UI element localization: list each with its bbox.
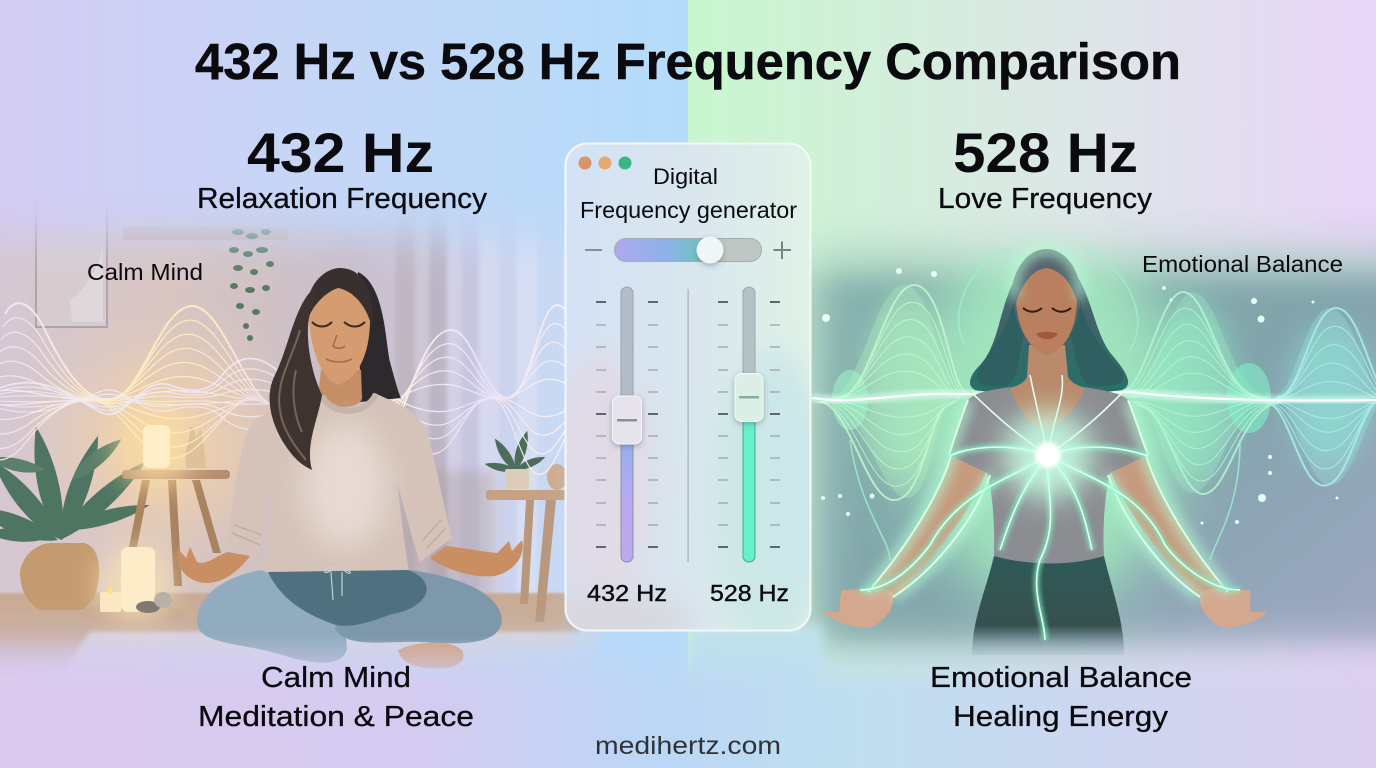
rabbit figurine [186,427,206,468]
wall [0,216,501,594]
back hair [356,272,401,402]
panel title line 1: Digital [653,164,718,189]
lobe fills [828,285,1376,498]
central bright line [812,392,1376,401]
small vase [547,464,564,490]
hair top [307,268,373,328]
heading: 528 Hz: 528 Hz [953,121,1138,184]
label: Calm Mind: Calm Mind [87,259,203,285]
sweater collar [322,394,376,411]
central horizontal glow [812,392,1376,401]
floor [0,592,581,668]
outer aura stroke [868,400,1228,597]
woman meditating [177,268,523,668]
left arm [868,456,986,604]
label: Emotional Balance: Emotional Balance [1142,251,1343,277]
secondary lavender wave [0,358,282,429]
feet [398,642,463,668]
candle tray [80,603,186,625]
tendrils glow [860,447,1240,640]
core glow [1003,410,1093,500]
back hair [970,252,1128,393]
divider [688,289,689,562]
left hand [177,547,250,583]
picture frame [35,220,108,328]
arc tendrils [850,248,1240,560]
432 Hz slider [612,287,642,562]
curtains [394,228,536,592]
tick marks [596,302,780,547]
right hand [430,540,523,576]
teal backdrop [803,234,1376,664]
hair highlights [279,330,306,460]
stones [136,592,172,613]
face [1016,268,1077,355]
left leg [197,570,347,663]
gold wave family [0,303,272,460]
nose and lips [326,335,352,362]
horizontal slider knob [696,236,724,264]
left hair strands [977,300,1024,386]
panel: digital frequency generator [564,142,812,632]
core star [1035,442,1061,468]
plus icon [774,242,791,259]
readout: 528 Hz: 528 Hz [710,580,789,606]
wave lobe glow [864,300,1370,480]
small candle [100,586,121,612]
heading: 432 Hz: 432 Hz [247,121,434,184]
432 Hz knob [612,396,642,444]
small potted plant [484,430,547,489]
sweater highlight [303,423,387,547]
eyes and mouth [1023,308,1071,312]
hair top [1011,249,1083,320]
caption: Healing Energy: Healing Energy [953,701,1169,733]
readout: 432 Hz: 432 Hz [587,580,667,606]
arm aura glow [868,249,1228,597]
sweater [226,393,452,574]
right lobe lines [1266,308,1376,486]
footer: website: medihertz.com [595,732,781,760]
tall candle glow [99,547,171,623]
right sound waves [812,285,1376,500]
tall candle [121,547,155,612]
right arm [1111,456,1228,604]
soft blue area below the panel [688,625,823,700]
neck [318,370,362,407]
right-side wave family [381,305,587,474]
subheading: Love Frequency: Love Frequency [938,183,1153,215]
left lobe lines [818,285,968,500]
caption: Meditation and Peace: Meditation & Peace [198,701,474,733]
shirt [949,387,1148,564]
528 Hz slider [735,287,763,562]
tendrils [860,375,1240,640]
closed eyes [312,322,365,326]
lips [1036,332,1058,339]
right scene: energy background [803,228,1376,664]
minus icon [585,249,602,251]
table lamp glow [117,401,197,489]
panel tint [566,353,810,630]
pants [972,556,1124,655]
rug [72,630,598,664]
lower curtain tone [395,470,495,600]
panel title line 2: Frequency generator [580,197,797,223]
right side table [486,490,566,622]
caption: Calm Mind: Calm Mind [261,662,411,694]
528 Hz knob [735,374,763,422]
hanging plant [229,229,274,341]
neck and chest [1010,345,1085,429]
background: left half [0,0,688,768]
drawstring [324,565,350,600]
left scene: meditation room [0,211,598,668]
shelf [123,227,288,240]
table lamp [143,425,170,468]
bottom colour band [0,630,1376,768]
horizontal slider [614,236,762,264]
right hair strands [1070,300,1124,386]
right hand [1200,588,1267,628]
sleeve folds [232,520,446,548]
window dots [578,156,632,170]
panel body [566,144,810,630]
center lobe lines [1121,292,1282,494]
caption: Emotional Balance: Emotional Balance [930,662,1192,694]
subheading: Relaxation Frequency: Relaxation Frequency [197,183,488,215]
glowing woman [824,248,1267,655]
big plant [0,427,150,542]
front hair [270,285,322,470]
basket pot [20,543,99,610]
sparkles [821,268,1338,524]
body glow [913,230,1183,610]
panel border [566,144,810,630]
side table [122,470,230,586]
top green fade [816,240,1376,284]
left sound waves [0,303,587,474]
left hand [824,588,893,628]
pants lap [268,570,427,626]
title: 432 Hz vs 528 Hz Frequency Comparison [195,33,1181,90]
right leg [335,570,502,643]
warm light on wall [60,350,270,530]
background: right half [688,0,1376,768]
face [309,288,370,385]
